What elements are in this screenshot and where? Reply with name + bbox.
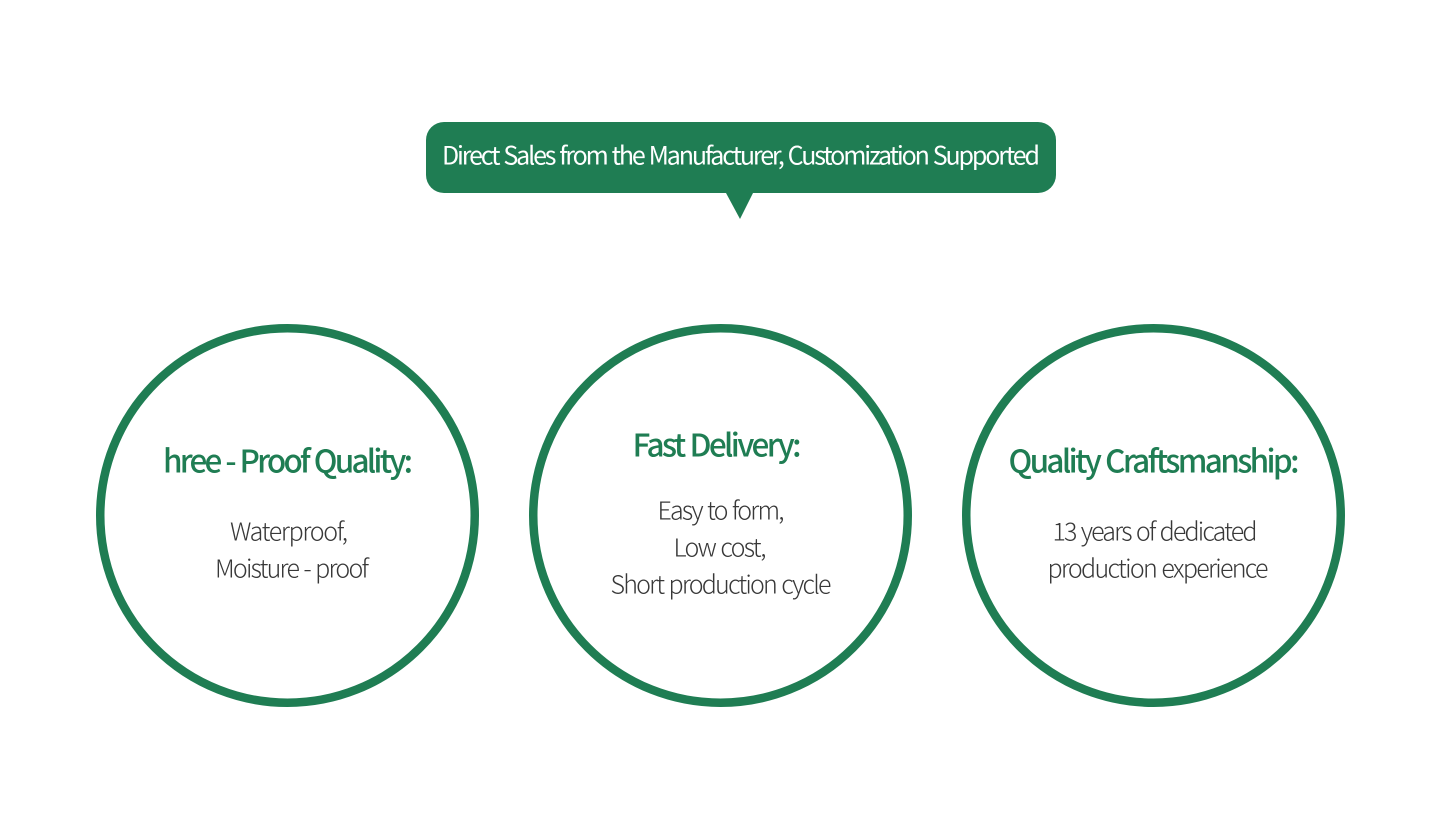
text block: delivery details: Low cost, (674, 528, 766, 564)
heading: quality craftsmanship: Quality Craftsmanship: (1008, 436, 1300, 482)
text block: craftsmanship details (1048, 512, 1268, 586)
panel: fast delivery (533, 328, 908, 703)
heading: three-proof quality: hree - Proof Quality: (163, 436, 413, 482)
text block: delivery details (610, 492, 832, 602)
heading: fast delivery: Fast Delivery: (632, 420, 802, 466)
text block: delivery details: Easy to form, (658, 492, 784, 528)
text block: craftsmanship details: 13 years of dedicated (1052, 512, 1258, 548)
callout: speech bubble (426, 122, 1056, 219)
callout: speech bubble: Direct Sales from the Manufacturer, Customization Supported (442, 136, 1040, 172)
text block: three-proof details (215, 512, 371, 586)
text block: three-proof details: Moisture - proof (215, 550, 371, 586)
text block: three-proof details: Waterproof, (230, 512, 348, 548)
text block: craftsmanship details: production experience (1048, 550, 1268, 586)
panel: three-proof quality (100, 328, 475, 703)
text block: delivery details: Short production cycle (610, 566, 832, 602)
panel: quality craftsmanship (966, 328, 1341, 703)
